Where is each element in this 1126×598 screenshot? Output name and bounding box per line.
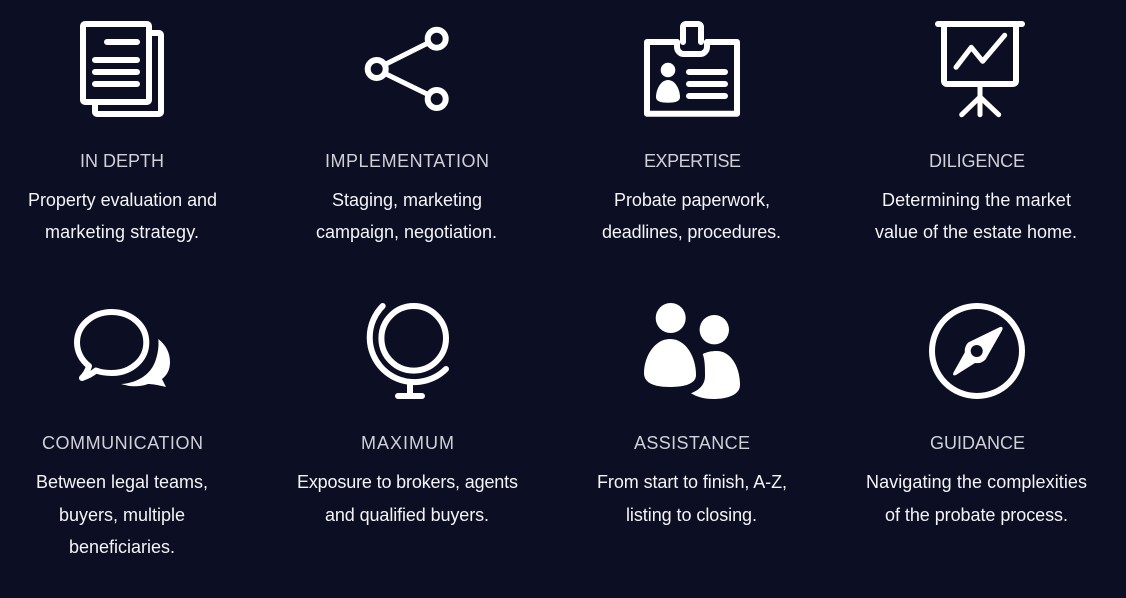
panel: guidance (866, 306, 1087, 525)
heading: implementation: IMPLEMENTATION (325, 151, 489, 171)
text: guidance description: of the probate process. (885, 505, 1068, 525)
text: diligence description: Determining the market (882, 190, 1071, 210)
text: diligence description: value of the estate home. (875, 222, 1077, 242)
icon: compass (932, 306, 1022, 396)
heading: maximum: MAXIMUM (361, 433, 454, 453)
icon: desk globe (370, 306, 446, 396)
panel: maximum (297, 306, 518, 525)
text: communication description: Between legal teams, (36, 472, 208, 492)
panel: implementation (316, 30, 497, 242)
panel: in depth (28, 24, 217, 242)
text: expertise description: Probate paperwork, (614, 190, 770, 210)
text: in depth description: Property evaluation and (28, 190, 217, 210)
panel: assistance (597, 303, 787, 525)
heading: expertise: EXPERTISE (644, 151, 741, 171)
icon: documents (83, 24, 161, 114)
heading: assistance: ASSISTANCE (634, 433, 750, 453)
text: guidance description (866, 472, 1087, 525)
icon: speech bubbles (77, 312, 170, 387)
text: maximum description: and qualified buyers. (325, 505, 489, 525)
text: maximum description: Exposure to brokers, agents (297, 472, 518, 492)
icon: id badge (647, 24, 737, 114)
text: guidance description: Navigating the complexities (866, 472, 1087, 492)
text: communication description (36, 472, 208, 557)
text: diligence description (875, 190, 1077, 242)
heading: diligence: DILIGENCE (929, 151, 1025, 171)
panel: communication (36, 312, 208, 557)
text: expertise description (602, 190, 781, 242)
text: maximum description (297, 472, 518, 525)
text: assistance description: From start to finish, A-Z, (597, 472, 787, 492)
text: implementation description: campaign, negotiation. (316, 222, 497, 242)
icon: presentation board (938, 24, 1022, 115)
text: communication description: beneficiaries. (69, 537, 175, 557)
panel: diligence (875, 24, 1077, 242)
text: assistance description (597, 472, 787, 525)
heading: communication: COMMUNICATION (42, 433, 203, 453)
heading: in depth: IN DEPTH (80, 151, 164, 171)
icon: two people (644, 303, 740, 399)
panel: expertise (602, 24, 781, 242)
text: communication description: buyers, multiple (59, 505, 185, 525)
text: in depth description (28, 190, 217, 242)
text: in depth description: marketing strategy. (45, 222, 199, 242)
text: expertise description: deadlines, procedures. (602, 222, 781, 242)
heading: guidance: GUIDANCE (930, 433, 1025, 453)
text: implementation description: Staging, marketing (332, 190, 482, 210)
text: implementation description (316, 190, 497, 242)
icon: share (368, 30, 446, 108)
text: assistance description: listing to closing. (626, 505, 757, 525)
